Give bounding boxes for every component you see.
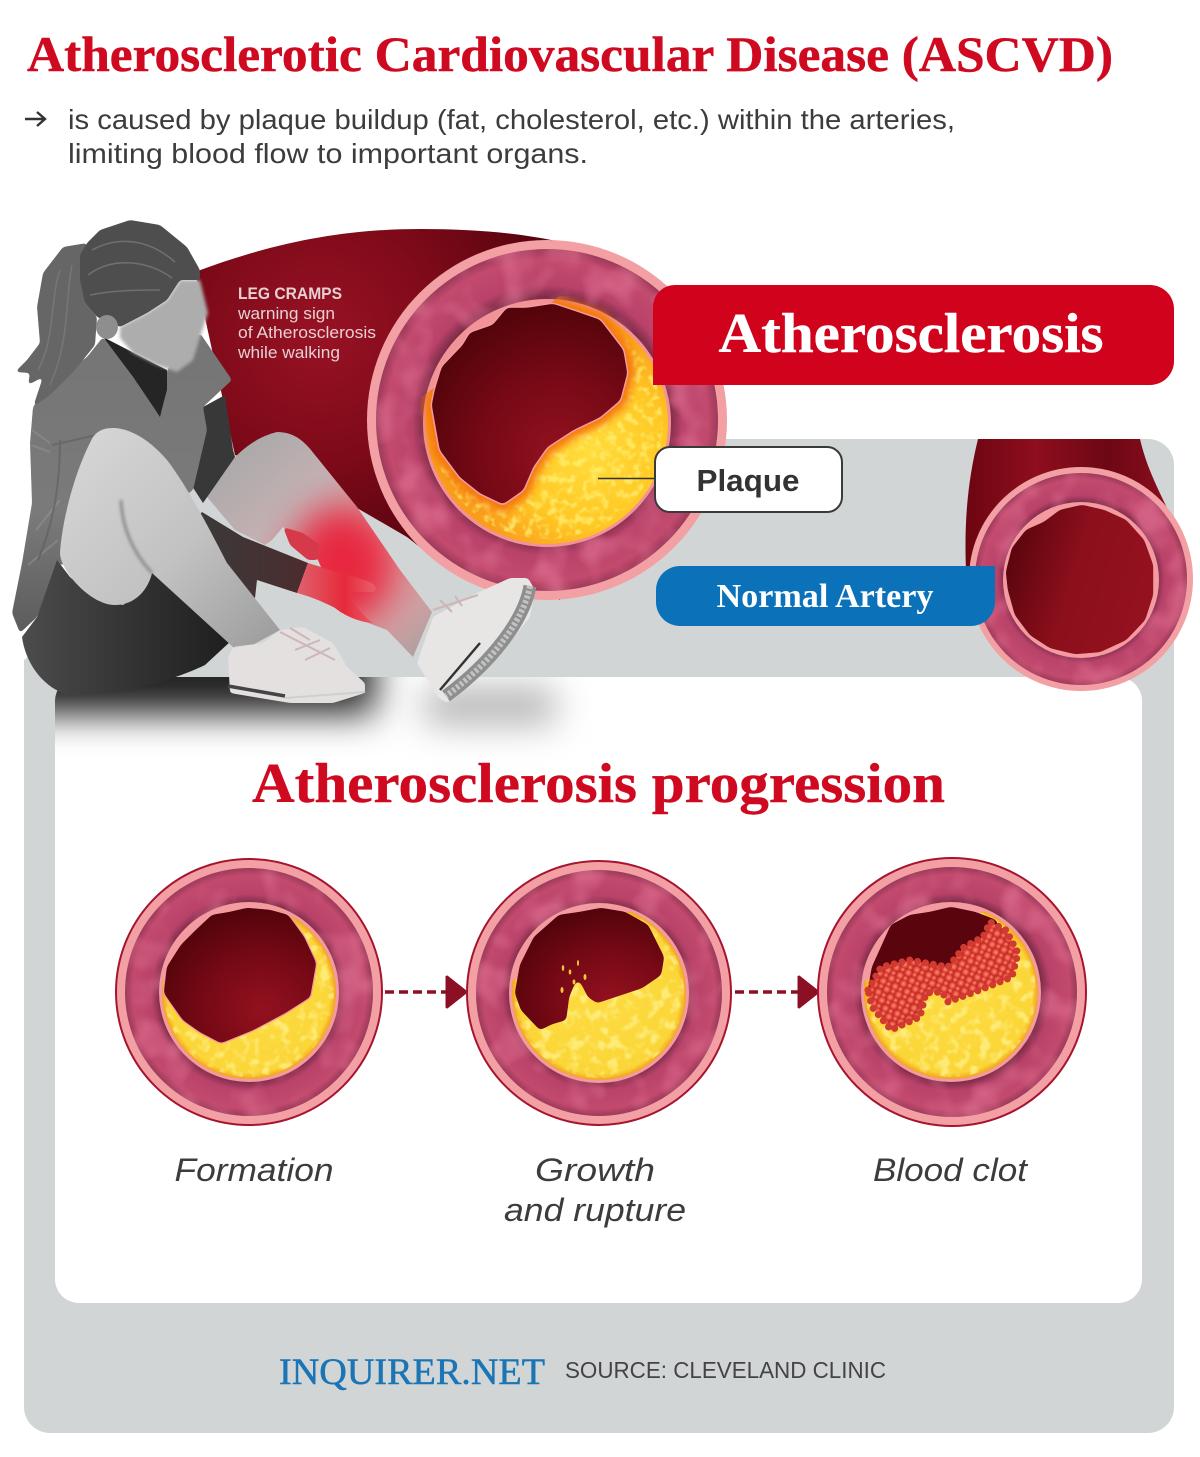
far-side long sleeve bbox=[190, 395, 235, 503]
rupture sparks bbox=[560, 960, 586, 993]
panel: grey background bbox=[24, 439, 1174, 1433]
far leg bbox=[207, 432, 432, 657]
callout: Normal Artery label: Normal Artery bbox=[716, 578, 934, 615]
near shoe bbox=[228, 627, 365, 703]
plaque bbox=[864, 905, 1038, 1079]
plaque bbox=[512, 906, 686, 1080]
icon: arrow bbox=[25, 112, 45, 126]
fingers bbox=[283, 527, 320, 560]
leg cramps text: LEG CRAMPS bbox=[238, 285, 342, 303]
panel: white progression card bbox=[55, 677, 1142, 1303]
big artery tube bbox=[195, 229, 620, 600]
caption: Growth and rupture bbox=[504, 1152, 686, 1228]
plaque bbox=[426, 302, 668, 544]
clot bbox=[868, 922, 1018, 1030]
leg cramps text: warning sign bbox=[237, 305, 335, 323]
title: Atherosclerotic Cardiovascular Disease (ASCVD) bbox=[27, 26, 1113, 82]
leg cramps text: while walking bbox=[237, 344, 340, 362]
face bbox=[120, 280, 208, 372]
artery: growth and rupture bbox=[467, 861, 731, 1125]
intro text: limiting blood flow to important organs. bbox=[68, 138, 588, 169]
person holding calf bbox=[12, 220, 535, 703]
plaque bbox=[162, 905, 336, 1079]
ponytail bbox=[15, 243, 97, 407]
arrow: formation to growth bbox=[385, 977, 466, 1007]
normal artery cross-section bbox=[969, 467, 1193, 691]
torso shirt bbox=[12, 333, 232, 633]
normal artery tube bbox=[966, 439, 1168, 600]
caption: Blood clot: Blood clot bbox=[873, 1152, 1028, 1188]
near arm sleeve bbox=[195, 512, 308, 598]
callout: Normal Artery label bbox=[656, 566, 995, 626]
hair bbox=[80, 220, 200, 327]
far shoe bbox=[417, 578, 535, 703]
lumen bbox=[1006, 505, 1153, 654]
big artery cross-section with plaque bbox=[367, 240, 727, 600]
caption: Growth and rupture: Growth bbox=[535, 1152, 655, 1188]
shorts bbox=[22, 560, 232, 695]
logo: Inquirer.net: INQUIRER.NET bbox=[279, 1352, 545, 1393]
person shadow bbox=[55, 677, 574, 746]
lumen bbox=[868, 907, 1006, 990]
lumen bbox=[164, 908, 316, 1043]
lumen with rupture bbox=[515, 908, 664, 1030]
near leg bbox=[60, 428, 280, 652]
callout: Plaque label bbox=[598, 447, 842, 512]
caption: Growth and rupture: and rupture bbox=[504, 1192, 686, 1228]
leg cramps text: of Atherosclerosis bbox=[238, 324, 376, 342]
shirt hem and folds bbox=[28, 430, 110, 565]
caption: Formation: Formation bbox=[174, 1152, 334, 1188]
callout: Plaque label: Plaque bbox=[696, 463, 800, 498]
intro text bbox=[25, 104, 955, 169]
progression heading: Atherosclerosis progression bbox=[252, 753, 945, 815]
ear bbox=[96, 315, 118, 339]
near leg crease bbox=[121, 500, 152, 573]
callout: Atherosclerosis banner: Atherosclerosis bbox=[718, 303, 1104, 365]
artery: formation bbox=[116, 859, 382, 1125]
hand bbox=[297, 563, 376, 623]
arrow: growth to blood clot bbox=[735, 977, 818, 1007]
narrowed lumen rim bbox=[432, 304, 627, 504]
leg cramps text bbox=[237, 285, 376, 362]
hair strands bbox=[38, 241, 175, 385]
intro text: is caused by plaque buildup (fat, cholesterol, etc.) within the arteries, bbox=[68, 104, 955, 135]
artery: blood clot bbox=[818, 858, 1086, 1126]
callout: Atherosclerosis banner bbox=[653, 285, 1174, 385]
narrowed lumen bbox=[432, 304, 627, 504]
neck collar bbox=[103, 337, 167, 417]
lumen rim bbox=[164, 908, 316, 1043]
source credit: SOURCE: CLEVELAND CLINIC bbox=[565, 1357, 886, 1383]
